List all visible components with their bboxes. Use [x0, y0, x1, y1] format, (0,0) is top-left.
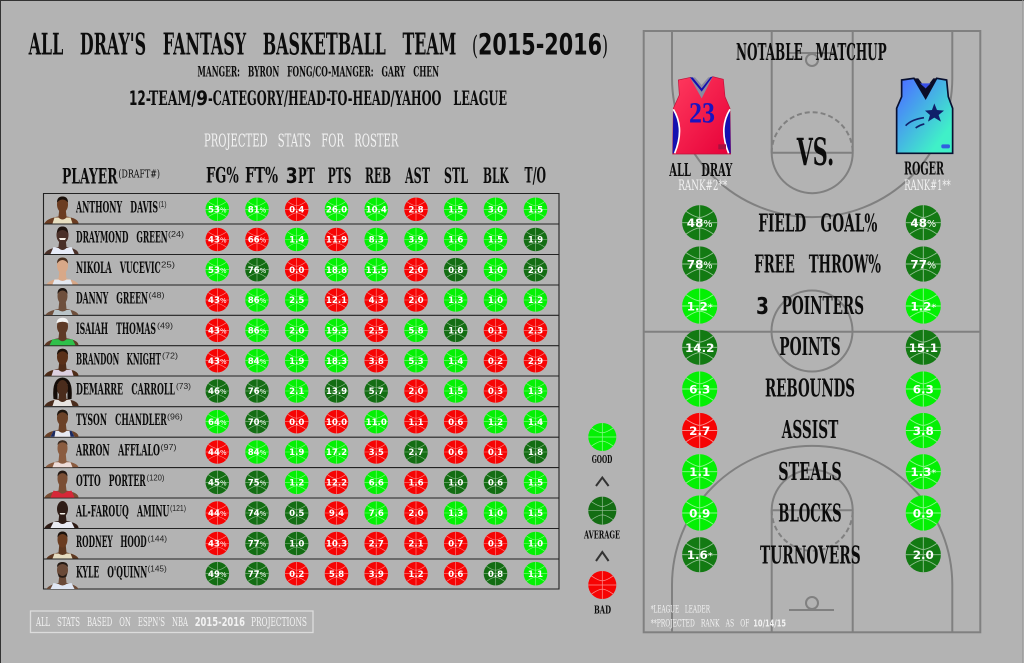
stat balls: 11.5: [366, 266, 387, 276]
matchup: points: POINTS: [779, 332, 841, 361]
stat balls: 3.5: [369, 448, 384, 458]
stat balls: 1.0: [488, 509, 503, 519]
stat balls: 12.1: [326, 296, 347, 306]
matchup: field goal: [682, 205, 941, 240]
stat balls: 0.2: [289, 570, 304, 580]
stat balls: 13.9: [326, 387, 347, 397]
matchup: steals: STEALS: [778, 457, 842, 486]
stat balls: 1.2: [488, 418, 503, 428]
stat balls: 43%: [208, 357, 227, 367]
section heading: projected stats: PROJECTED STATS FOR ROSTER: [204, 132, 399, 152]
matchup: 3 pointers: [682, 288, 941, 324]
table column headers: PT: [298, 163, 315, 188]
stat balls: 1.4: [528, 418, 543, 428]
stat balls: 2.0: [408, 387, 424, 397]
stat balls: 5.8: [329, 570, 344, 580]
stat balls: 1.9: [289, 357, 304, 367]
icon: red jersey: [673, 77, 731, 154]
arrow: chevron up: [596, 478, 609, 486]
stat balls: 2.3: [528, 326, 543, 336]
stat balls: 86%: [248, 326, 267, 336]
stat balls: 3.0: [488, 206, 503, 216]
matchup: free throw: FREE THROW%: [754, 249, 881, 278]
matchup: free throw: 77%: [910, 257, 936, 271]
stat balls: 1.3: [528, 387, 543, 397]
matchup: assist: [682, 413, 941, 448]
player name: 25): [161, 260, 175, 270]
table column headers: [62, 162, 546, 189]
table column headers: FG%: [206, 162, 239, 188]
stat balls: 1.9: [528, 236, 543, 246]
stat balls: 2.0: [408, 266, 424, 276]
player name: (72): [162, 351, 178, 361]
stat balls: 76%: [248, 387, 267, 397]
row: Brandon Knight: [44, 349, 547, 376]
stat balls: 0.6: [448, 570, 463, 580]
icon: good ball: [588, 423, 616, 451]
stat balls: 3.9: [408, 236, 424, 246]
stat balls: 0.0: [289, 266, 304, 276]
matchup: points: [682, 330, 941, 365]
player photo: [46, 532, 78, 558]
matchup: turnovers: 1.6*: [687, 548, 713, 562]
table column headers: BLK: [483, 163, 509, 188]
stat balls: 7.6: [369, 509, 384, 519]
player name: (24): [168, 229, 184, 239]
stat balls: 1.2: [289, 478, 304, 488]
player name: [76, 410, 183, 429]
subtitle: league format: [129, 86, 507, 110]
player photo: [44, 410, 78, 437]
stat balls: 0.6: [488, 478, 503, 488]
stat balls: 0.8: [448, 266, 463, 276]
legend: [583, 423, 620, 616]
stat balls: 1.5: [448, 387, 463, 397]
stat balls: 1.3: [448, 509, 463, 519]
stat balls: 3.9: [369, 570, 384, 580]
matchup: 3 pointers: 1.2*: [687, 299, 713, 313]
matchup: points: 15.1: [909, 341, 938, 355]
matchup: 3 pointers: POINTERS: [782, 291, 864, 320]
player name: (96): [167, 411, 183, 421]
player name: DANNY GREEN: [76, 289, 148, 308]
stat balls: 1.0: [289, 540, 304, 550]
player photo: [46, 288, 78, 315]
stat balls: 2.9: [528, 357, 543, 367]
matchup: steals: [682, 454, 941, 489]
table column headers: (DRAFT#): [118, 168, 160, 180]
row: Danny Green: [46, 288, 547, 315]
player photo: [44, 196, 78, 224]
stat balls: 43%: [208, 236, 227, 246]
stat balls: 76%: [248, 266, 267, 276]
player name: ARRON AFFLALO: [75, 440, 160, 460]
player name: (121): [170, 503, 186, 513]
row: Rodney Hood: [46, 532, 547, 558]
stat balls: 84%: [248, 357, 267, 367]
stat balls: 1.5: [528, 478, 543, 488]
stat balls: 4.3: [369, 296, 384, 306]
stat balls: 75%: [248, 478, 267, 488]
title: ): [602, 32, 608, 62]
icon: blue jersey: [897, 78, 953, 153]
matchup: points: 14.2: [685, 341, 714, 355]
player name: (1): [158, 199, 167, 209]
stat balls: 1.0: [488, 296, 503, 306]
stat balls: 43%: [208, 326, 227, 336]
stat balls: 74%: [248, 509, 267, 519]
stat balls: [206, 379, 547, 403]
stat balls: 18.8: [326, 266, 347, 276]
stat balls: 9.4: [329, 509, 344, 519]
row: Draymond Green: [44, 226, 547, 254]
stat balls: 1.4: [448, 357, 463, 367]
team label: Roger: RANK#1**: [904, 178, 951, 194]
player name: (48): [148, 290, 165, 300]
stat balls: 1.8: [528, 448, 543, 458]
stat balls: 18.3: [326, 357, 347, 367]
subtitle: league format: 12: [129, 87, 146, 110]
title: ALL DRAY'S FANTASY BASKETBALL TEAM: [28, 28, 456, 62]
stat balls: 2.0: [408, 509, 424, 519]
stat balls: 1.9: [289, 448, 304, 458]
player name: (97): [160, 442, 177, 452]
player name: (120): [146, 472, 165, 482]
stat balls: [206, 532, 547, 555]
matchup: assist: 2.7: [689, 424, 710, 438]
matchup: blocks: 0.9: [689, 506, 710, 520]
stat balls: 53%: [208, 206, 227, 216]
stat balls: [206, 318, 547, 342]
stat balls: 2.7: [369, 540, 384, 550]
player name: RODNEY HOOD: [76, 532, 147, 551]
player name: DRAYMOND GREEN: [76, 228, 168, 247]
stat balls: 1.5: [528, 206, 543, 216]
matchup: turnovers: TURNOVERS: [760, 540, 861, 569]
stat balls: [206, 349, 547, 372]
player photo: [44, 226, 78, 254]
row: Kyle O'Quinn: [46, 562, 547, 589]
stat balls: [206, 501, 547, 525]
footnote box: data source: PROJECTIONS: [251, 615, 307, 629]
player name: [76, 562, 167, 581]
matchup: steals: 1.3*: [910, 465, 936, 479]
matchup: 3 pointers: 3: [756, 294, 769, 320]
matchup: free throw: 78%: [687, 257, 713, 271]
player photo: [44, 501, 78, 528]
stat balls: 45%: [208, 478, 227, 488]
player photo: [46, 258, 78, 284]
row: Isaiah Thomas: [44, 318, 547, 345]
stat balls: 1.1: [408, 418, 424, 428]
stat balls: 44%: [208, 509, 227, 519]
icon: red jersey: 23: [689, 96, 715, 129]
stat balls: [206, 410, 547, 434]
footnote box: data source: ALL STATS BASED ON ESPN'S NBA: [35, 615, 188, 629]
matchup: rebounds: REBOUNDS: [765, 374, 855, 403]
matchup: free throw: [682, 246, 941, 282]
player photo: [46, 440, 78, 467]
table column headers: PLAYER: [62, 164, 118, 189]
player name: DEMARRE CARROLL: [76, 380, 175, 399]
matchup: field goal: 48%: [910, 216, 936, 230]
stat balls: 0.2: [488, 357, 503, 367]
stat balls: 46%: [208, 387, 227, 397]
stat balls: 81%: [248, 206, 267, 216]
stat balls: 26.0: [326, 206, 347, 216]
stat balls: 1.5: [488, 236, 503, 246]
legend label: good: GOOD: [592, 453, 613, 466]
stat balls: 1.5: [528, 509, 543, 519]
player name: [76, 289, 165, 308]
title: (: [472, 32, 478, 62]
matchup: field goal: FIELD GOAL%: [758, 208, 877, 238]
row: Tyson Chandler: [44, 410, 547, 437]
matchup: blocks: [682, 495, 941, 531]
player name: BRANDON KNIGHT: [76, 349, 161, 368]
stat balls: [206, 562, 547, 586]
player name: KYLE O'QUINN: [76, 562, 147, 581]
stat balls: 1.0: [528, 540, 543, 550]
table column headers: PTS: [328, 163, 351, 188]
stat balls: 1.0: [448, 478, 463, 488]
stat balls: 66%: [248, 236, 267, 246]
table column headers: REB: [365, 163, 391, 188]
subtitle: league format: -TEAM/: [146, 86, 196, 110]
stat balls: 10.4: [366, 206, 387, 216]
team label: All Dray: ALL DRAY: [669, 161, 733, 181]
player photo: [44, 349, 78, 376]
stat balls: 2.1: [408, 540, 424, 550]
stat balls: 11.9: [326, 236, 347, 246]
stat balls: 2.0: [528, 266, 543, 276]
stat balls: 8.3: [369, 236, 384, 246]
player photo: [46, 562, 78, 589]
stat balls: 2.8: [408, 206, 424, 216]
player photo: [44, 318, 78, 345]
vs label: VS.: [796, 130, 834, 174]
matchup: rebounds: 6.3: [689, 382, 710, 396]
stat balls: 1.4: [289, 236, 304, 246]
stat balls: 6.6: [369, 478, 384, 488]
matchup: blocks: 0.9: [913, 506, 934, 520]
player name: ISAIAH THOMAS: [76, 319, 156, 338]
player name: [76, 258, 175, 277]
stat balls: 2.5: [289, 296, 304, 306]
stat balls: 1.6: [448, 236, 463, 246]
stat balls: 0.6: [448, 448, 463, 458]
stat balls: 0.3: [488, 540, 503, 550]
stat balls: 0.4: [289, 206, 304, 216]
heading: notable matchup: NOTABLE MATCHUP: [736, 38, 887, 66]
stat balls: 0.8: [488, 570, 503, 580]
player name: [76, 471, 165, 490]
stat balls: 0.6: [448, 418, 463, 428]
stat balls: [206, 228, 547, 251]
row: DeMarre Carroll: [44, 378, 547, 406]
footnote: league leader: *LEAGUE LEADER: [651, 604, 711, 616]
player name: NIKOLA VUCEVIC: [76, 258, 161, 277]
team label: All Dray: [669, 161, 733, 194]
row: Arron Afflalo: [46, 440, 547, 467]
player name: [76, 228, 184, 247]
stat balls: 77%: [248, 540, 267, 550]
stat balls: 5.3: [408, 357, 424, 367]
player name: ANTHONY DAVIS: [75, 198, 158, 216]
stat balls: 1.1: [528, 570, 543, 580]
stat balls: 0.1: [488, 326, 503, 336]
legend label: bad: BAD: [594, 603, 611, 616]
player name: [76, 349, 178, 368]
table column headers: T/O: [524, 162, 546, 188]
matchup: steals: 1.1: [689, 465, 710, 479]
stat balls: [206, 258, 547, 282]
roster stats table: [44, 194, 559, 589]
table column headers: STL: [444, 163, 468, 188]
stat balls: 53%: [208, 266, 227, 276]
stat balls: 0.0: [289, 418, 304, 428]
basketball court: [644, 31, 980, 632]
matchup: blocks: BLOCKS: [778, 499, 842, 528]
stat balls: 2.0: [289, 326, 304, 336]
stat balls: 10.0: [326, 418, 347, 428]
stat balls: 1.0: [488, 266, 503, 276]
stat balls: 0.5: [289, 509, 304, 519]
stat balls: 2.5: [369, 326, 384, 336]
stat balls: 44%: [208, 448, 227, 458]
player name: TYSON CHANDLER: [76, 410, 167, 429]
footnote: projected rank: 10/14/15: [753, 619, 786, 630]
table column headers: AST: [404, 163, 430, 188]
stat balls: 12.2: [326, 478, 347, 488]
player photo: [44, 471, 78, 498]
stat balls: 5.8: [408, 326, 424, 336]
stat balls: 1.2: [408, 570, 424, 580]
player name: [75, 198, 167, 216]
footnote box: data source: [30, 611, 313, 632]
stat balls: 64%: [208, 418, 227, 428]
stat balls: 0.3: [488, 387, 503, 397]
stat balls: 17.2: [326, 448, 347, 458]
table column headers: FT%: [245, 162, 278, 188]
title: 2015-2016: [478, 28, 602, 62]
row: Nikola Vucevic: [46, 258, 547, 284]
stat balls: 70%: [248, 418, 267, 428]
stat balls: 1.5: [448, 206, 463, 216]
icon: average ball: [588, 497, 616, 525]
footnote: projected rank: **PROJECTED RANK AS OF: [651, 618, 749, 630]
stat balls: 10.3: [326, 540, 347, 550]
row: Al-Farouq Aminu: [44, 501, 547, 528]
subtitle: league format: 9: [196, 87, 208, 110]
row: Anthony Davis: [44, 196, 547, 224]
player name: (49): [157, 320, 173, 330]
stat balls: [206, 470, 547, 494]
team label: All Dray: RANK#2**: [678, 178, 727, 194]
stat balls: 1.3: [448, 296, 463, 306]
stat balls: [206, 198, 547, 221]
player name: OTTO PORTER: [76, 471, 146, 490]
stat balls: 86%: [248, 296, 267, 306]
player name: [76, 380, 191, 399]
matchup: turnovers: [682, 537, 941, 572]
stat balls: 0.7: [448, 540, 463, 550]
subtitle: managers: MANGER: BYRON FONG/CO-MANGER: GARY CHEN: [198, 64, 439, 80]
team label: Roger: [904, 160, 951, 194]
player name: [75, 502, 186, 521]
stat balls: 49%: [208, 570, 227, 580]
stat balls: 77%: [248, 570, 267, 580]
stat balls: 5.7: [369, 387, 384, 397]
stat balls: 2.0: [408, 296, 424, 306]
stat balls: 43%: [208, 296, 227, 306]
player name: (145): [148, 564, 167, 574]
matchup: turnovers: 2.0: [913, 548, 934, 562]
row: Otto Porter: [44, 470, 547, 498]
player name: (144): [148, 533, 167, 543]
subtitle: league format: -CATEGORY/HEAD-TO-HEAD/YAHOO LEAGUE: [208, 86, 507, 110]
stat balls: 1.2: [528, 296, 543, 306]
matchup: rebounds: [682, 371, 941, 407]
table column headers: 3: [286, 164, 298, 188]
stat balls: [206, 288, 547, 312]
player name: [76, 319, 173, 338]
matchup: assist: ASSIST: [781, 415, 838, 444]
stat balls: 2.1: [289, 387, 304, 397]
footnote box: data source: 2015-2016: [195, 615, 245, 629]
player name: [75, 440, 177, 460]
icon: bad ball: [588, 571, 616, 599]
stat balls: 43%: [208, 540, 227, 550]
team label: Roger: ROGER: [904, 160, 944, 180]
stat balls: 0.1: [488, 448, 503, 458]
stat balls: 11.0: [366, 418, 387, 428]
stat balls: 19.3: [326, 326, 347, 336]
legend label: average: AVERAGE: [583, 528, 620, 541]
stat balls: 84%: [248, 448, 267, 458]
stat balls: 2.7: [408, 448, 424, 458]
player name: [76, 532, 167, 551]
stat balls: [206, 440, 547, 464]
player name: (73): [176, 381, 191, 391]
player name: AL-FAROUQ AMINU: [75, 502, 170, 521]
matchup: 3 pointers: 1.2*: [910, 299, 936, 313]
stat balls: 1.6: [408, 478, 424, 488]
matchup: assist: 3.8: [913, 424, 934, 438]
stat balls: 1.0: [448, 326, 463, 336]
player photo: [44, 378, 78, 406]
arrow: chevron up: [596, 552, 609, 561]
stat balls: 3.8: [369, 357, 384, 367]
matchup: field goal: 48%: [687, 216, 713, 230]
matchup: rebounds: 6.3: [913, 382, 934, 396]
